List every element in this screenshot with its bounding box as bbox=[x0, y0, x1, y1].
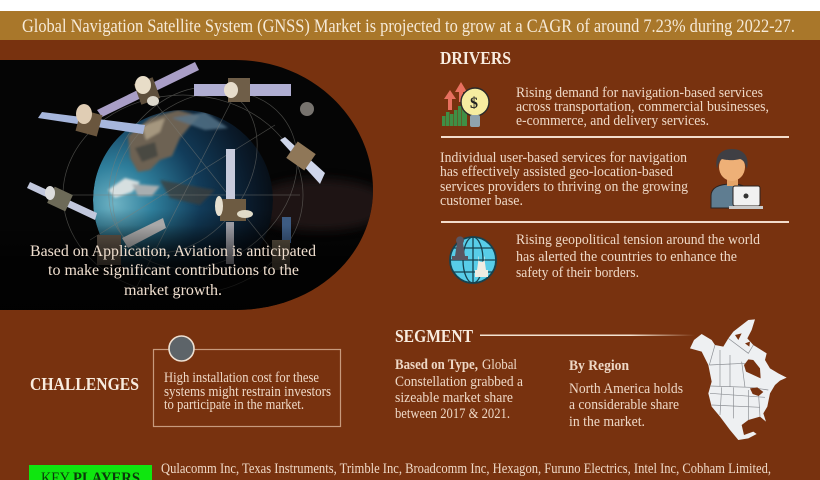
satellite top right bbox=[194, 78, 291, 102]
text backdrop bbox=[72, 228, 359, 310]
segment by type: Global bbox=[482, 357, 517, 373]
segment by type: Based on Type, bbox=[395, 357, 478, 373]
orbit lines bbox=[62, 88, 304, 300]
challenges box: High installation cost for these bbox=[164, 370, 319, 386]
challenges box: to participate in the market. bbox=[164, 397, 304, 413]
segment by region: a considerable share bbox=[569, 397, 679, 413]
satellite upper left bbox=[38, 104, 145, 136]
small moon bbox=[300, 102, 314, 116]
driver text: geopolitical: has alerted the countries to enhance the bbox=[516, 249, 737, 265]
top white strip bbox=[0, 0, 820, 11]
satellite lower faded bbox=[97, 217, 291, 270]
driver text: geopolitical: safety of their borders. bbox=[516, 265, 639, 281]
satellite centre bbox=[215, 149, 253, 264]
icon: growth bulb: $ bbox=[470, 95, 478, 112]
segment by type: Constellation grabbed a bbox=[395, 374, 524, 390]
segment by type bbox=[395, 357, 524, 422]
satellite top centre bbox=[97, 62, 199, 117]
driver text: demand: across transportation, commercial businesses, bbox=[516, 99, 769, 115]
driver text: user services: services providers to thriving on the growing bbox=[440, 179, 688, 195]
earth globe bbox=[93, 110, 273, 290]
driver text: user services: Individual user-based services for navigation bbox=[440, 150, 688, 166]
segment by region: By Region bbox=[569, 358, 629, 374]
segment by region: North America holds bbox=[569, 381, 683, 397]
challenges box bbox=[154, 336, 340, 426]
milky way haze bbox=[270, 178, 373, 232]
map: North America bbox=[690, 319, 787, 440]
application text: to make significant contributions to the bbox=[48, 262, 299, 279]
heading: drivers: DRIVERS bbox=[440, 48, 511, 68]
application text: Based on Application, Aviation is anticipated bbox=[30, 243, 316, 260]
key players label bbox=[29, 465, 152, 480]
heading: segment: SEGMENT bbox=[395, 326, 473, 346]
driver text: demand bbox=[516, 85, 769, 129]
segment by type: between 2017 & 2021. bbox=[395, 406, 510, 422]
icon: person with laptop bbox=[711, 149, 763, 209]
satellite right bbox=[280, 137, 325, 184]
segment by type: sizeable market share bbox=[395, 390, 513, 406]
heading: challenges: CHALLENGES bbox=[30, 374, 139, 394]
icon: globe with chess pieces bbox=[450, 236, 496, 283]
application text: market growth. bbox=[124, 282, 222, 299]
driver text: geopolitical bbox=[516, 232, 761, 281]
driver text: user services: customer base. bbox=[440, 193, 523, 209]
segment by region bbox=[569, 358, 683, 430]
icon: growth bulb bbox=[442, 82, 489, 127]
panel: satellite image with application text bbox=[0, 54, 390, 310]
driver text: user services: has effectively assisted geo-location-based bbox=[440, 164, 674, 180]
segment by region: in the market. bbox=[569, 414, 645, 430]
challenges box: systems might restrain investors bbox=[164, 384, 331, 400]
driver text: demand: Rising demand for navigation-based services bbox=[516, 85, 763, 101]
satellite lower left bbox=[27, 182, 97, 220]
driver text: user services bbox=[440, 150, 688, 209]
driver text: geopolitical: Rising geopolitical tension around the world bbox=[516, 232, 761, 248]
application text bbox=[30, 243, 316, 299]
driver text: demand: e-commerce, and delivery services. bbox=[516, 113, 709, 129]
